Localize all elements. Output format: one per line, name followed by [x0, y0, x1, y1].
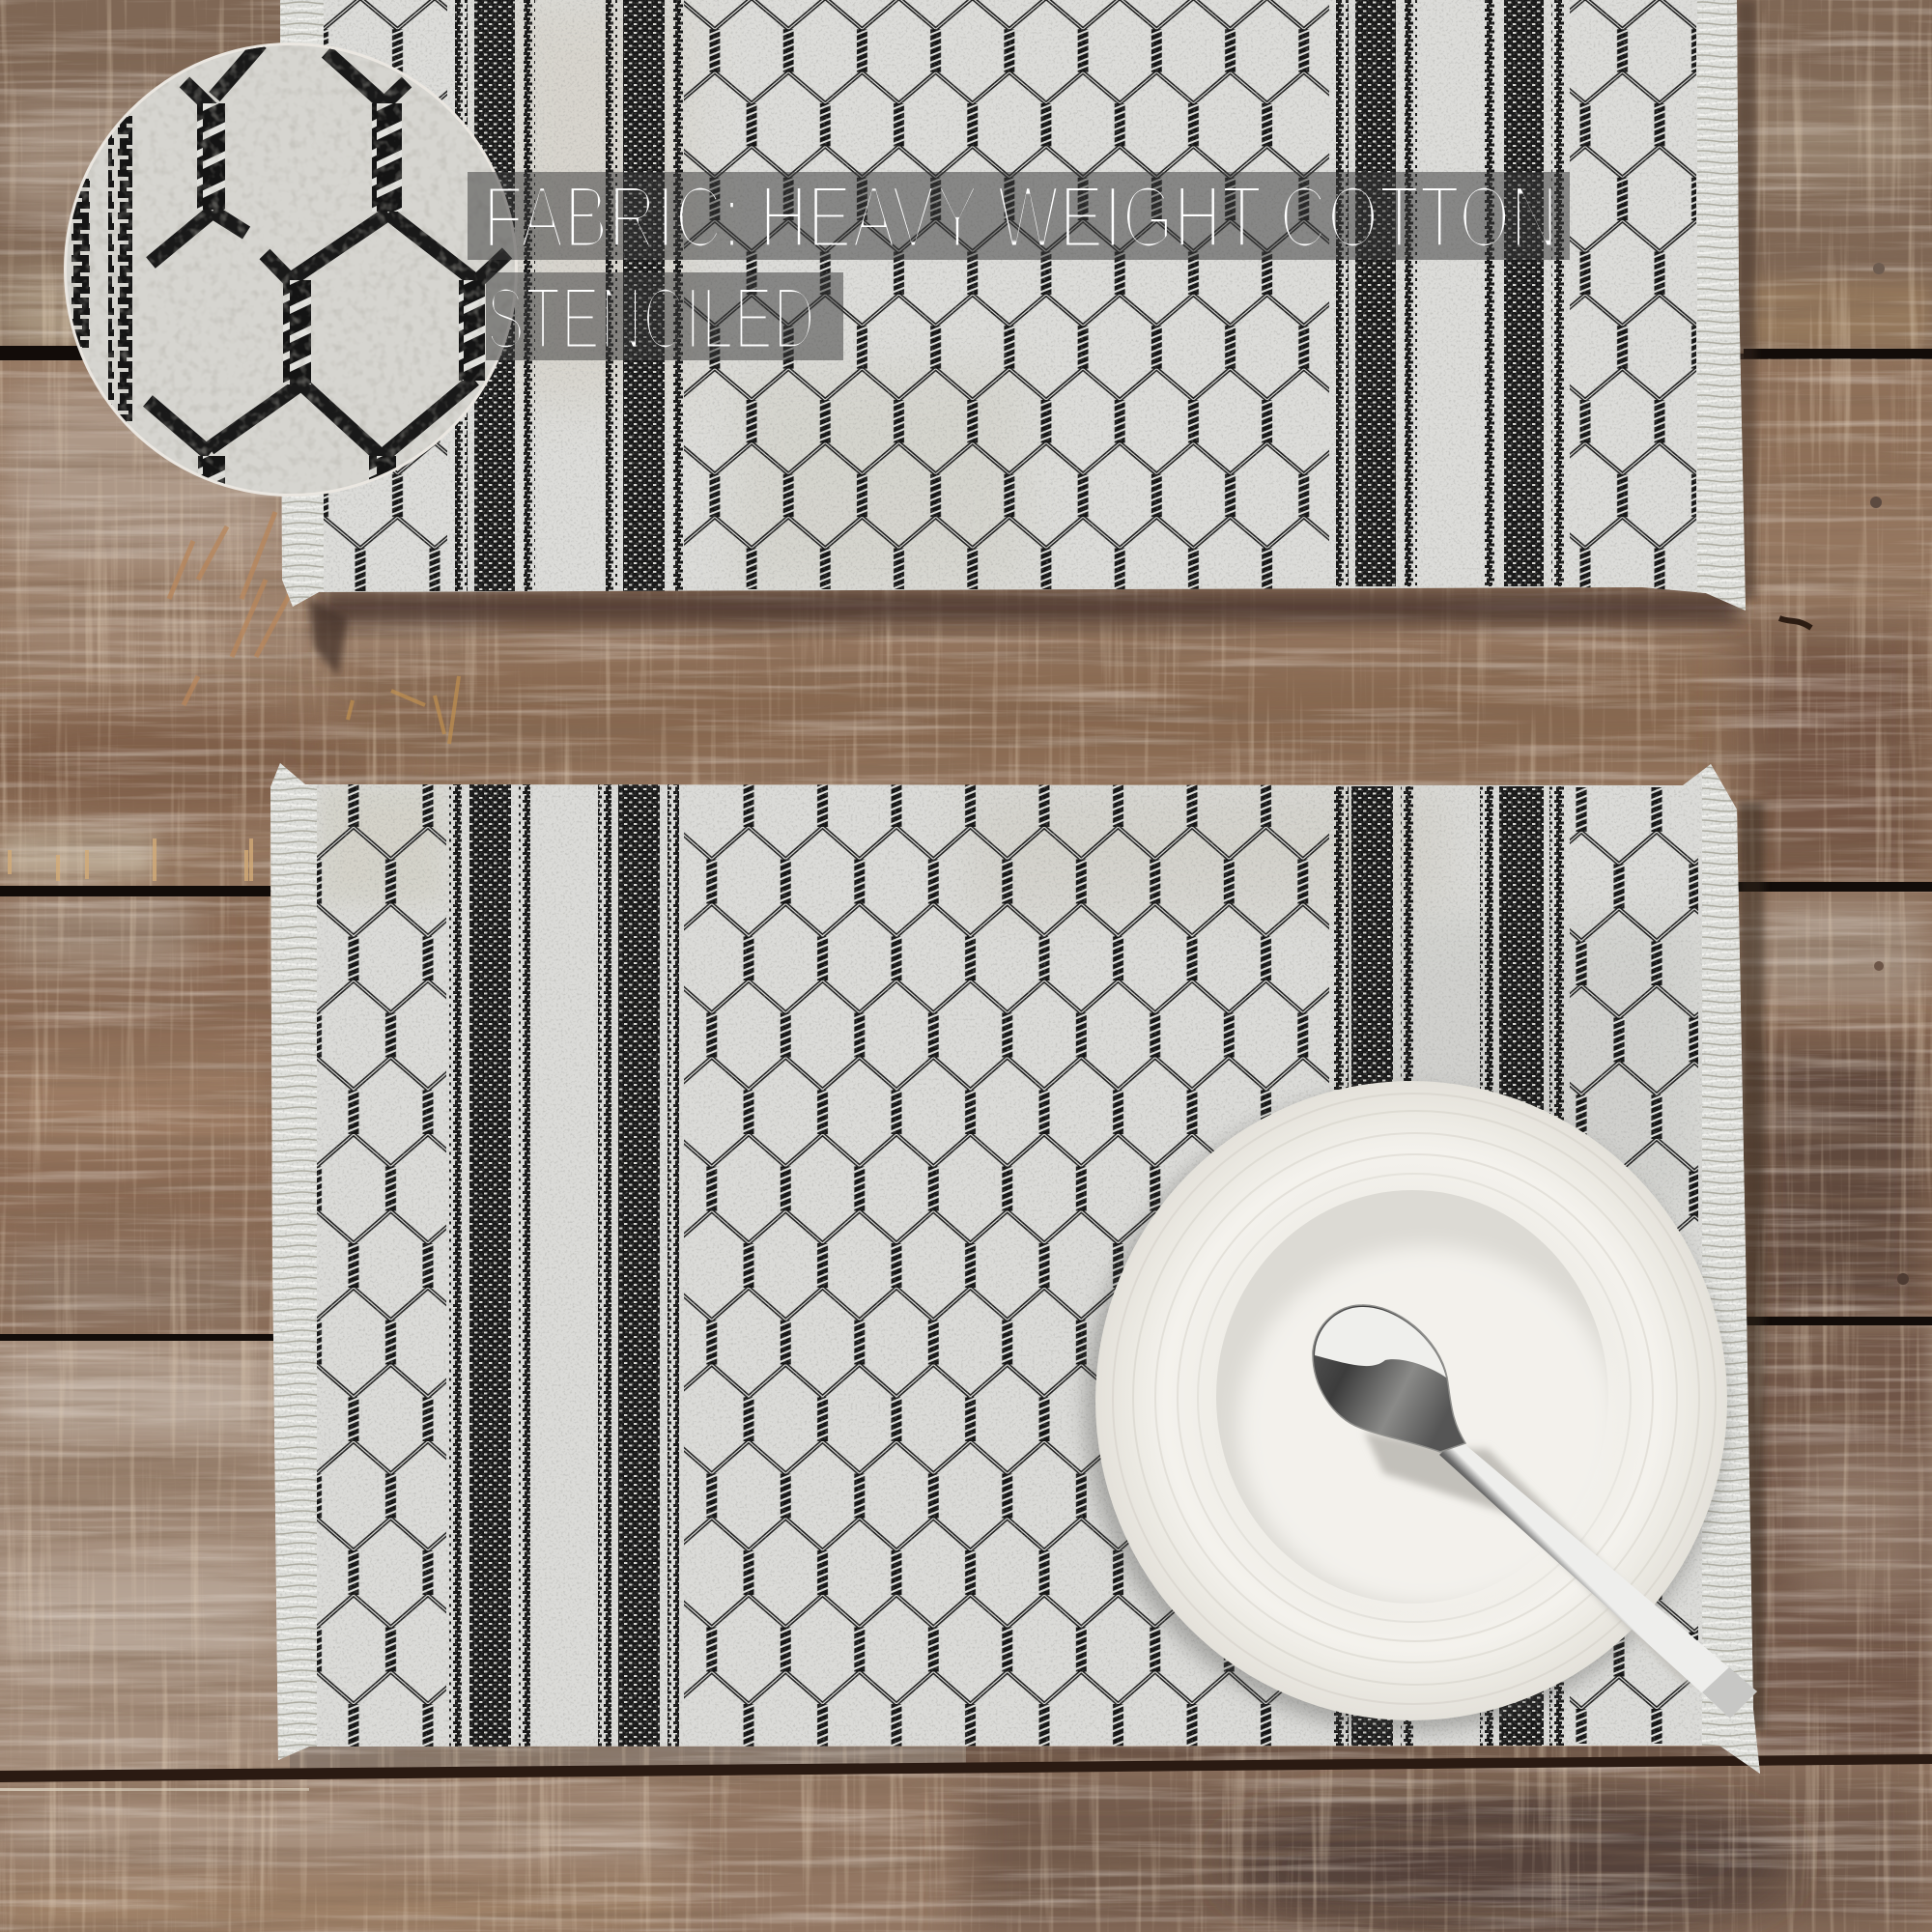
plate well — [1216, 1190, 1608, 1604]
plate rim — [1095, 1081, 1727, 1720]
magnified twists — [197, 103, 485, 504]
caption background line 2 — [486, 272, 843, 360]
spoon bowl — [1313, 1305, 1465, 1452]
plank 1 — [0, 0, 1932, 357]
magnified fabric inset — [58, 39, 522, 504]
chicken wire print right — [1570, 787, 1698, 1744]
weave texture — [266, 758, 1768, 1777]
spoon bowl reflection — [1315, 1307, 1446, 1378]
chicken wire print right — [1570, 0, 1696, 591]
plate well highlight — [1238, 1246, 1617, 1605]
fringe left — [280, 1, 324, 607]
fabric base — [266, 758, 1768, 1777]
scratches and knots — [10, 263, 1909, 1285]
plate rings — [1113, 1094, 1716, 1704]
magnified wires — [148, 43, 507, 457]
magnified weave texture — [58, 39, 522, 502]
plank 3 — [0, 887, 1932, 1341]
fringe left — [266, 758, 317, 1777]
grain sack stripes — [455, 0, 1564, 591]
spoon — [1313, 1305, 1757, 1719]
fringe right — [1697, 0, 1750, 618]
shadow under top placemat — [309, 0, 1756, 676]
bottom placemat — [266, 758, 1768, 1777]
fringe right — [1702, 758, 1765, 1777]
white plate — [1095, 1081, 1729, 1720]
plank 5 — [0, 1758, 1932, 1932]
chicken wire print centre — [684, 0, 1329, 589]
grain sack stripes — [449, 784, 1564, 1747]
inset border — [64, 43, 518, 497]
fabric base — [275, 0, 1753, 618]
weave texture — [275, 0, 1753, 618]
caption background line 1 — [468, 172, 1570, 260]
magnified stripes — [71, 116, 132, 425]
spoon handle end — [1702, 1667, 1757, 1719]
chicken wire print left — [324, 0, 447, 591]
plate shadow — [1085, 1090, 1726, 1731]
chicken wire print centre — [684, 784, 1329, 1747]
plank 2 — [0, 357, 1932, 898]
spoon shadow on plate — [1364, 1432, 1729, 1690]
plank 4 — [0, 1323, 1932, 1777]
spoon handle — [1439, 1437, 1757, 1719]
caption line 2: STENCILED — [486, 270, 815, 368]
shadow beside bottom placemat — [1739, 802, 1764, 1729]
inset content — [58, 39, 522, 504]
top placemat — [275, 0, 1753, 618]
plank gaps — [0, 346, 1932, 1782]
caption line 1: FABRIC: HEAVY WEIGHT COTTON — [483, 168, 1558, 267]
chicken wire print left — [317, 784, 446, 1747]
